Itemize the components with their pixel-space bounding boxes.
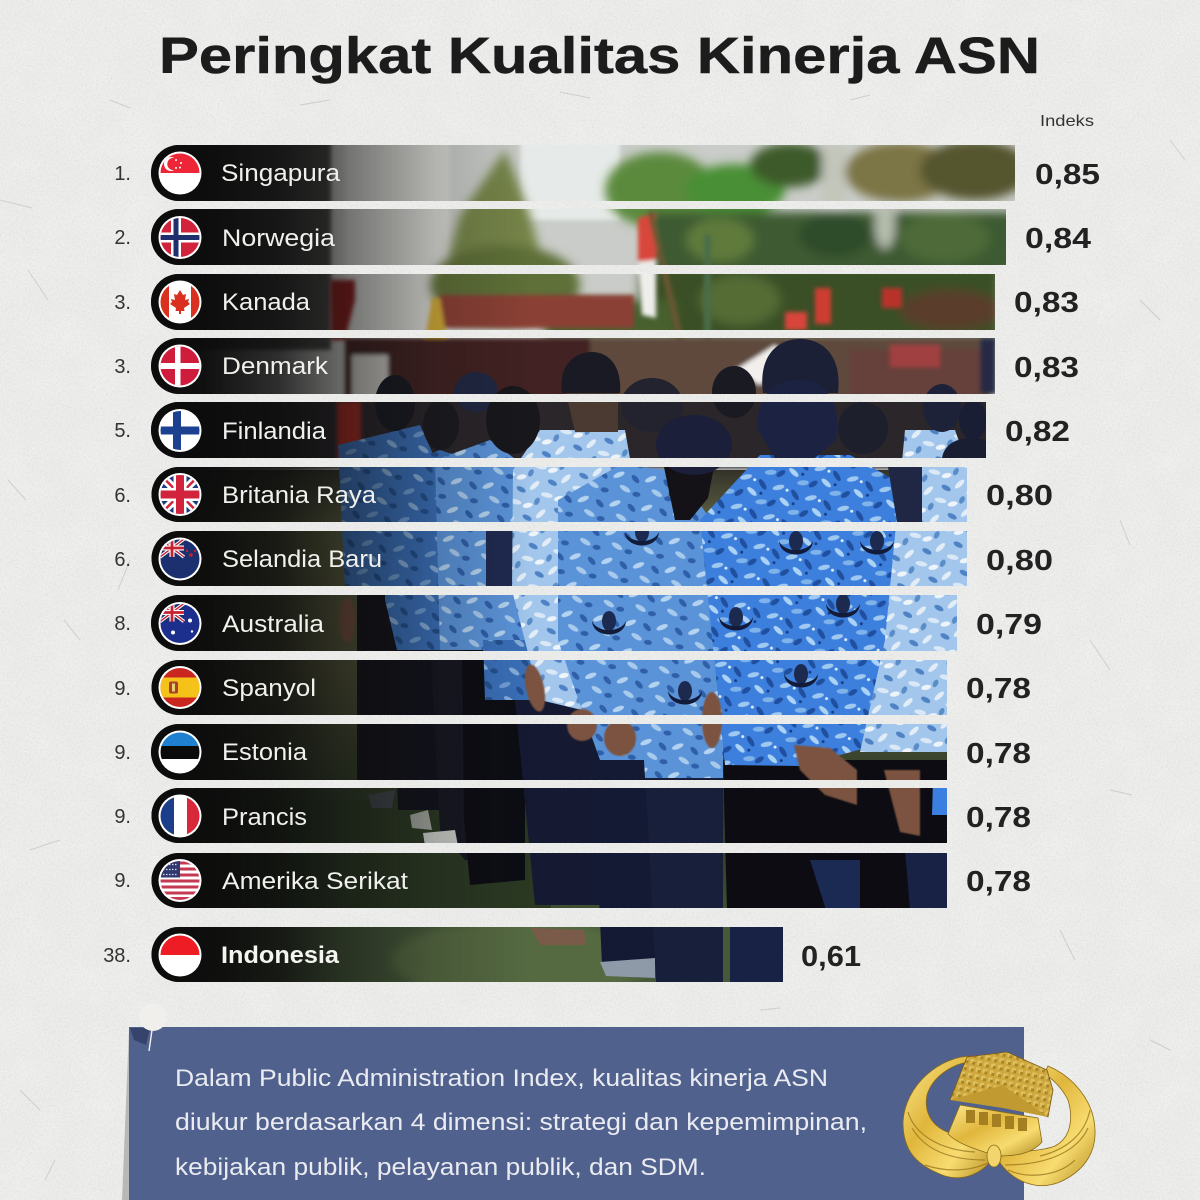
left wing	[903, 1056, 995, 1178]
row 7: Selandia Baru: 6.	[114, 549, 131, 571]
row 13: Indonesia: 38.	[103, 945, 131, 967]
row 7: Selandia Baru: 0,80	[986, 545, 1053, 577]
row 1: Singapura	[114, 152, 1100, 194]
windows	[966, 1110, 1027, 1131]
row 7: Selandia Baru	[114, 538, 1053, 580]
roof	[950, 1052, 1053, 1117]
workers: shirts	[338, 425, 968, 815]
row 11: Prancis: 9.	[114, 806, 131, 828]
callout panel: explanation note	[122, 1003, 1024, 1200]
dark gradient overlay	[151, 140, 530, 990]
note text: diukur berdasarkan 4 dimensi: strategi dan kepemimpinan,	[175, 1109, 867, 1136]
note text: Dalam Public Administration Index, kualitas kinerja ASN	[175, 1065, 828, 1092]
panel background	[129, 1027, 1024, 1200]
row 13: Indonesia: 0,61	[801, 941, 861, 973]
row 13: Indonesia: Indonesia	[221, 942, 340, 969]
index axis label: Indeks	[1040, 113, 1094, 130]
pin	[130, 1003, 167, 1051]
row 5: Finlandia: 0,82	[1005, 416, 1070, 448]
building body	[948, 1105, 1042, 1156]
row 10: Estonia: Estonia	[222, 739, 308, 766]
row 12: Amerika Serikat: 0,78	[966, 866, 1031, 898]
workers: legs	[513, 680, 950, 985]
icon: gold Korpri emblem	[903, 1052, 1095, 1186]
row 3: Kanada: 3.	[114, 292, 131, 314]
row 10: Estonia	[114, 730, 1031, 774]
workers: batik emblems	[592, 522, 894, 704]
row 1: Singapura: 0,85	[1035, 159, 1100, 191]
row 9: Spanyol: 0,78	[966, 673, 1031, 705]
row 6: Britania Raya: 6.	[114, 485, 131, 507]
row 4: Denmark: 0,83	[1014, 352, 1079, 384]
row 12: Amerika Serikat	[114, 859, 1031, 902]
row 9: Spanyol: Spanyol	[222, 675, 316, 702]
row 2: Norwegia	[114, 216, 1091, 259]
knot	[987, 1145, 1001, 1167]
row 9: Spanyol: 9.	[114, 678, 131, 700]
note text	[175, 1065, 867, 1181]
row 4: Denmark: Denmark	[222, 353, 329, 380]
row 1: Singapura: 1.	[114, 163, 131, 185]
photo background: sky and building	[151, 140, 1021, 990]
workers: hands	[339, 598, 920, 836]
row 8: Australia: 8.	[114, 613, 131, 635]
row 3: Kanada	[114, 280, 1079, 324]
row 8: Australia	[114, 602, 1042, 645]
row 13: Indonesia	[103, 934, 861, 976]
row 5: Finlandia: Finlandia	[222, 418, 327, 445]
row 6: Britania Raya: 0,80	[986, 480, 1053, 512]
row 3: Kanada: 0,83	[1014, 287, 1079, 319]
row 4: Denmark: 3.	[114, 356, 131, 378]
row 3: Kanada: Kanada	[222, 289, 311, 316]
row 6: Britania Raya: Britania Raya	[222, 482, 377, 509]
panel shadow	[122, 1030, 132, 1200]
feather lines	[908, 1110, 1090, 1175]
row 10: Estonia: 9.	[114, 742, 131, 764]
note text: kebijakan publik, pelayanan publik, dan SDM.	[175, 1154, 706, 1181]
workers: heads and caps	[375, 339, 987, 475]
row 7: Selandia Baru: Selandia Baru	[222, 546, 382, 573]
roof front	[950, 1085, 1048, 1117]
row 4: Denmark	[114, 344, 1079, 388]
row 6: Britania Raya	[114, 473, 1053, 516]
row 11: Prancis: Prancis	[222, 804, 307, 831]
row 8: Australia: 0,79	[976, 609, 1042, 641]
row 12: Amerika Serikat: 9.	[114, 870, 131, 892]
title: Peringkat Kualitas Kinerja ASN	[159, 27, 1040, 84]
row 11: Prancis	[114, 794, 1031, 838]
row 2: Norwegia: Norwegia	[222, 225, 336, 252]
row 5: Finlandia: 5.	[114, 420, 131, 442]
row 12: Amerika Serikat: Amerika Serikat	[222, 868, 408, 895]
row 9: Spanyol	[114, 666, 1031, 709]
bar chart: photo-filled bars	[151, 140, 1030, 1000]
row 10: Estonia: 0,78	[966, 738, 1031, 770]
row 2: Norwegia: 2.	[114, 227, 131, 249]
photo background: flagpole, red roof and gate	[151, 212, 1021, 468]
row 8: Australia: Australia	[222, 611, 325, 638]
right wing	[997, 1066, 1095, 1186]
row 5: Finlandia	[114, 409, 1070, 452]
row 11: Prancis: 0,78	[966, 802, 1031, 834]
photo background: trees	[430, 140, 1030, 340]
row 2: Norwegia: 0,84	[1025, 223, 1091, 255]
row 1: Singapura: Singapura	[221, 160, 341, 187]
grass and far legs	[151, 590, 791, 1000]
